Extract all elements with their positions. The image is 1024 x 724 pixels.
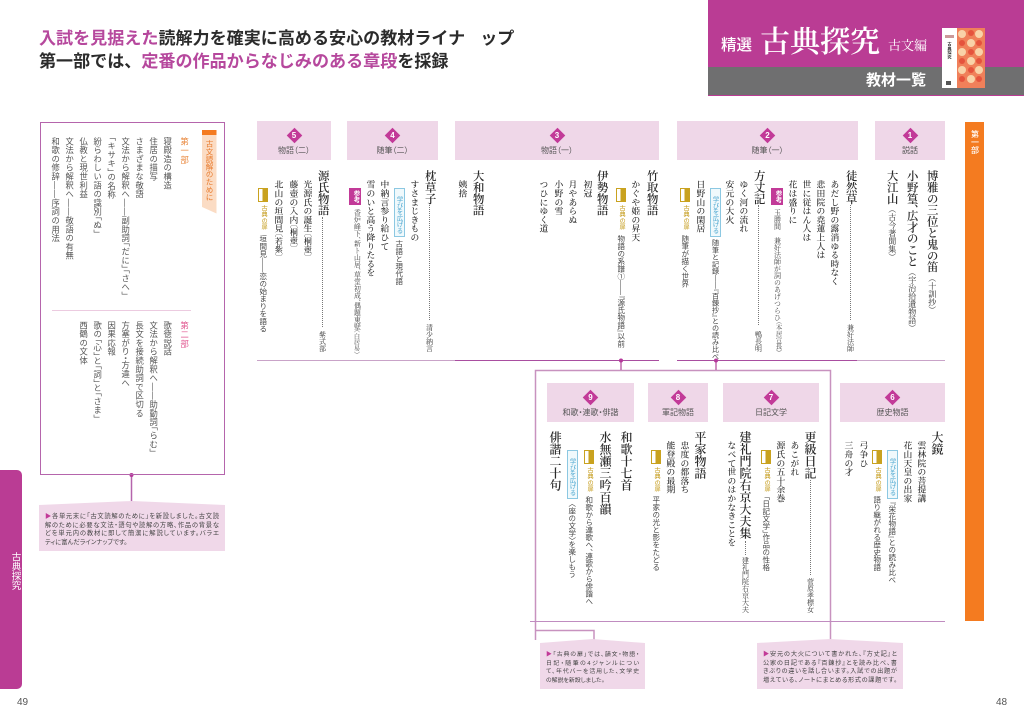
- title: [39, 28, 514, 70]
- book cover: 古典探究: [946, 41, 952, 60]
- tag: 古典の扉: 古典の扉: [586, 467, 593, 492]
- extension topic: 古語と現代語: [395, 240, 404, 285]
- section header 6: 歴史物語: 歴史物語: [876, 408, 908, 416]
- tag: 古典の扉: 古典の扉: [763, 467, 770, 492]
- chapter list: 枕草子: 中納言参り給ひて: [379, 180, 389, 250]
- side tab label: 古典探究: [10, 552, 20, 590]
- icon: door: [761, 450, 771, 464]
- work: 大和物語: 大和物語: [472, 170, 484, 216]
- callout: 古文読解のために: ティに富んだラインナップです。: [45, 539, 127, 546]
- chapter list: 徒然草: あだし野の露消ゆる時なく: [829, 180, 839, 286]
- panel: 古文読解のために: 長文を接続助詞で区切る: [135, 320, 145, 417]
- tag: 古典の扉: 古典の扉: [682, 205, 689, 230]
- work: 和歌十七首: 和歌十七首: [619, 431, 633, 491]
- part tab label: 第一部: [970, 130, 980, 154]
- panel: section 2 contents: 安元の大火: [724, 180, 734, 224]
- callout: 古文読解のために: [39, 501, 225, 551]
- panel: 古文読解のために: 文法から解釈へ——副助詞「だに」「さへ」: [121, 136, 131, 296]
- heading: 第一部: 第一部: [180, 136, 190, 164]
- chapter list: 伊勢物語: 初冠: [582, 180, 592, 198]
- door topic: 「日記文学」作品の性格: [762, 496, 771, 571]
- side tab: 古典探究: [0, 470, 22, 689]
- callout: 古典の扉: ▶「古典の扉」では、韻文・物語・: [546, 652, 639, 658]
- work: 博雅の三位と鬼の笛: 博雅の三位と鬼の笛 （十訓抄）: [926, 170, 938, 310]
- book cover: [942, 28, 985, 88]
- panel: section 5 contents: 北山の垣間見 〔若紫〕: [273, 180, 283, 257]
- chapter: かぐや姫の昇天: かぐや姫の昇天: [630, 180, 640, 242]
- section header 7: 日記文学: [723, 383, 819, 422]
- list: 第一部: 寝殿造の構造: [163, 136, 173, 189]
- section header 1: 説話: 1: [908, 131, 912, 140]
- panel: section 5 contents: [258, 170, 330, 352]
- panel: 古文読解のために: 紛らわしい語の識別「ぬ」: [93, 136, 103, 234]
- panel: section 4 contents: [349, 170, 436, 355]
- work: 水無瀬三吟百韻: 水無瀬三吟百韻: [598, 431, 612, 515]
- header banner: [708, 0, 1024, 96]
- author: 兼好法師: 兼好法師: [846, 324, 854, 352]
- door topic: 随筆が描く世界: [681, 235, 690, 288]
- extension topic: 〈座の文学〉を楽しもう: [568, 503, 577, 578]
- panel: 古文読解のために: 和歌の修辞——序詞の用法: [51, 136, 61, 242]
- panel: 古文読解のために: 「キサキ」の名称: [107, 136, 117, 199]
- tag: 参考: 参考: [774, 190, 781, 203]
- chapter: 姨捨: 姨捨: [457, 180, 467, 198]
- section header 9: 和歌・連歌・俳諧: [547, 383, 634, 422]
- work: 源氏物語: 源氏物語: [317, 170, 329, 216]
- title: 入試を見据えた読解力を確実に高める安心の教材ライナ ップ: [39, 28, 514, 48]
- panel: section 9 contents: [548, 431, 633, 605]
- author: 菅原孝標女: 菅原孝標女: [806, 578, 814, 613]
- chapter: なべて世のはかなきことを: なべて世のはかなきことを: [726, 441, 736, 547]
- series label: 精選: [721, 37, 752, 54]
- work: 小野篁、広才のこと: 小野篁、広才のこと （宇治拾遺物語）: [906, 170, 918, 328]
- icon: door: [651, 450, 661, 464]
- callout: 読み比べ: 公家の日記である『百錬抄』とを読み比べ、書: [763, 660, 897, 667]
- gray strip: [708, 67, 1024, 95]
- door topic: 物語の系譜①——『源氏物語』以前: [617, 235, 626, 348]
- section header 4: 随筆(二): 4: [390, 131, 395, 140]
- panel: section 8 contents: [651, 431, 707, 571]
- callout: 古典の扉: 日記・随筆の4ジャンルについ: [546, 661, 639, 667]
- panel: 古文読解のために: 方塞がり・方違へ: [121, 320, 131, 387]
- panel: 古文読解のために: さまざまな敬語: [135, 136, 145, 198]
- tag: 古典の扉: 古典の扉: [653, 467, 660, 492]
- chapter: すさまじきもの: すさまじきもの: [409, 180, 419, 242]
- section header 5: 物語(二): [257, 121, 331, 160]
- section header 8: 軍記物語: 軍記物語: [662, 408, 694, 416]
- icon: door: [584, 450, 594, 464]
- chapter: 日野山の閑居: 日野山の閑居: [695, 180, 705, 233]
- panel: 古文読解のために: 歌の「心」と「詞」と「さま」: [93, 320, 103, 419]
- author: 鴨長明: 鴨長明: [754, 331, 762, 352]
- panel: 古文読解のために: 仏教と現世利益: [79, 136, 89, 198]
- callout: 古典の扉: [540, 639, 645, 689]
- section header 3: 物語(一): 物語（一）: [541, 146, 573, 154]
- callout: 古文読解のために: ▶各単元末に「古文読解のために」を新設しました。古文読: [45, 513, 219, 520]
- section header 2: 随筆(一): [677, 121, 858, 160]
- work: 大江山: 大江山 （古今著聞集）: [886, 170, 898, 257]
- panel: section 2 contents: 花は盛りに: [787, 180, 797, 224]
- section header 7: 日記文学: 7: [769, 393, 773, 402]
- title: 第一部では、定番の作品からなじみのある章段を採録: [39, 52, 448, 70]
- reference reading: 玉勝間 兼好法師が詞のあげつらひ （本居宣長）: [774, 209, 782, 352]
- subheading: 教材一覧: [866, 72, 926, 89]
- tag: 学びを広げる: 学びを広げる: [396, 196, 402, 234]
- section header 6: 歴史物語: 6: [890, 393, 895, 402]
- tag: 学びを広げる: [394, 188, 404, 237]
- author: 紫式部: 紫式部: [318, 331, 326, 352]
- work: 更級日記: 更級日記: [803, 431, 817, 479]
- section header 4: 随筆(二): [347, 121, 438, 160]
- icon: door: [258, 188, 268, 202]
- edition label: 古文編: [888, 38, 927, 53]
- section header 2: 随筆(一): 随筆（一）: [752, 146, 784, 154]
- section header 9: 和歌・連歌・俳諧: 和歌・連歌・俳諧: [562, 408, 618, 416]
- section header 8: 軍記物語: [648, 383, 708, 422]
- tag: 古典の扉: 古典の扉: [874, 467, 881, 492]
- tag: 古典の扉: 古典の扉: [618, 205, 625, 230]
- tag: 学びを広げる: [710, 188, 720, 237]
- callout: 読み比べ: きぶりの違いを話し合います。入試での出題が: [763, 668, 897, 675]
- door topic: 平家の光と影をたどる: [652, 496, 661, 571]
- chapter list: 大鏡: 雲林院の菩提講: [916, 441, 926, 503]
- work: 竹取物語: 竹取物語: [646, 170, 658, 216]
- panel: section 6 contents: [843, 431, 944, 584]
- heading: 第二部: 第二部: [180, 320, 190, 348]
- tag: 学びを広げる: 学びを広げる: [712, 196, 718, 234]
- panel: section 4 contents: 雪のいと高う降りたるを: [365, 180, 375, 277]
- author: 建礼門院右京大夫: 建礼門院右京大夫: [742, 557, 750, 613]
- callout: 古文読解のために: どを単元内の教材に即して簡潔に解説しています。バラエ: [45, 530, 219, 537]
- panel: section 2 contents: 悲田院の堯蓮上人は: [815, 180, 825, 259]
- work: 俳諧二十句: 俳諧二十句: [548, 431, 562, 491]
- panel: section 3 contents: 月やあらぬ: [567, 180, 577, 224]
- tag: 古典の扉: 古典の扉: [260, 205, 267, 230]
- section header 1: 説話: 説話: [902, 146, 918, 154]
- panel: section 8 contents: 能登殿の最期: [665, 441, 675, 494]
- ribbon tag: 古文読解のために: [202, 130, 216, 214]
- panel: section 1 contents: [886, 170, 938, 328]
- icon: door: [872, 450, 882, 464]
- panel: section 2 contents: [680, 170, 857, 360]
- extension topic: 随筆と記録——『百錬抄』との読み比べ: [712, 239, 720, 360]
- callout: 古文読解のために: 解のために必要な文法・語句や読解の方略、作品の背景な: [45, 522, 219, 529]
- callout: 読み比べ: 増えている、ノートにまとめる形式の課題です。: [763, 677, 897, 684]
- tag: 学びを広げる: [886, 450, 898, 499]
- door topic: 和歌から連歌へ、連歌から俳諧へ: [585, 496, 594, 605]
- callout: 読み比べ: ▶安元の大火について書かれた、『方丈記』と: [763, 651, 897, 658]
- work: 平家物語: 平家物語: [693, 431, 707, 479]
- tag: 参考: 参考: [352, 190, 359, 203]
- section header 5: 物語(二): 5: [292, 131, 296, 140]
- work: 枕草子: 枕草子: [424, 170, 436, 204]
- section header 3: 物語(一): [455, 121, 659, 160]
- panel: section 5 contents: 藤壺の入内 〔桐壺〕: [288, 180, 298, 248]
- panel: 古文読解のために: 文法から解釈へ——助動詞「らむ」: [149, 320, 159, 453]
- page number left: 49: [17, 697, 28, 708]
- work: 大鏡: 大鏡: [930, 431, 944, 455]
- reference reading: 香炉峰下、新ト山居、草堂初成、偶題東壁 （白居易）: [352, 209, 359, 355]
- panel: section 6 contents: 三舟の才: [843, 441, 853, 476]
- ribbon tag: 古文読解のために: 古文読解のために: [205, 140, 214, 200]
- part tab: 第一部: [965, 122, 984, 621]
- panel: 古文読解のために: 因果応報: [107, 320, 117, 356]
- author: 清少納言: 清少納言: [426, 324, 434, 352]
- callout: 読み比べ: [757, 639, 903, 689]
- section header 8: 軍記物語: 8: [676, 393, 680, 402]
- section header 4: 随筆(二): 随筆（二）: [376, 146, 408, 154]
- work: 徒然草: 徒然草: [845, 170, 857, 204]
- section header 7: 日記文学: 日記文学: [755, 408, 787, 416]
- section header 2: 随筆(一): 2: [765, 131, 770, 140]
- panel: section 3 contents: [457, 170, 658, 348]
- panel: section 3 contents: つひにゆく道: [538, 180, 548, 233]
- door topic: 垣間見——恋の始まりを語る: [259, 235, 268, 332]
- section header 5: 物語(二): 物語（二）: [278, 146, 310, 154]
- tag: 参考: [349, 188, 361, 205]
- chapter list: 更級日記: あこがれ: [789, 441, 799, 476]
- tag: 学びを広げる: 学びを広げる: [888, 458, 896, 496]
- section header 1: 説話: [875, 121, 945, 160]
- chapter list: 平家物語: 忠度の都落ち: [679, 441, 689, 494]
- panel: 古文読解のために: 西鶴の文体: [79, 320, 89, 364]
- panel: section 3 contents: 小野の雪: [553, 180, 563, 215]
- chapter list: 方丈記: ゆく河の流れ: [738, 180, 748, 233]
- callout: 古典の扉: て、年代バーを活用した、文学史: [546, 669, 639, 675]
- tag: 学びを広げる: 学びを広げる: [568, 458, 576, 496]
- tag: 学びを広げる: [566, 450, 578, 499]
- panel: section 7 contents: 源氏の五十余巻: [775, 441, 785, 503]
- panel: 古文読解のために: 住居の描写: [149, 136, 159, 180]
- section header 9: 和歌・連歌・俳諧: 9: [588, 393, 593, 402]
- list: 第二部: 歌徳説話: [163, 320, 173, 356]
- extension topic: 『栄花物語』との読み比べ: [888, 501, 897, 584]
- panel: section 2 contents: 世に従はん人は: [801, 180, 811, 242]
- panel: section 7 contents: [726, 431, 817, 613]
- work: 伊勢物語: 伊勢物語: [596, 170, 608, 216]
- panel: section 6 contents: 花山天皇の出家: [902, 441, 912, 503]
- section header 3: 物語(一): 3: [555, 131, 559, 140]
- callout: 古典の扉: の解説を新設しました。: [546, 678, 605, 684]
- work: 方丈記: 方丈記: [753, 170, 765, 204]
- panel: 古文読解のために: [40, 122, 225, 475]
- chapter list: 源氏物語: 光源氏の誕生 〔桐壺〕: [302, 180, 312, 257]
- section header 6: 歴史物語: [840, 383, 945, 422]
- icon: door: [616, 188, 626, 202]
- work: 建礼門院右京大夫集: 建礼門院右京大夫集: [738, 431, 752, 539]
- book title: 古典探究: [760, 26, 880, 59]
- door topic: 語り継がれる歴史物語: [873, 496, 882, 571]
- chapter list: 大鏡 continued: 弓争ひ: [858, 441, 868, 467]
- page number right: 48: [996, 697, 1007, 708]
- icon: door: [680, 188, 690, 202]
- panel: 古文読解のために: 文法から解釈へ——敬語の有無: [65, 136, 75, 260]
- tag: 参考: [771, 188, 783, 205]
